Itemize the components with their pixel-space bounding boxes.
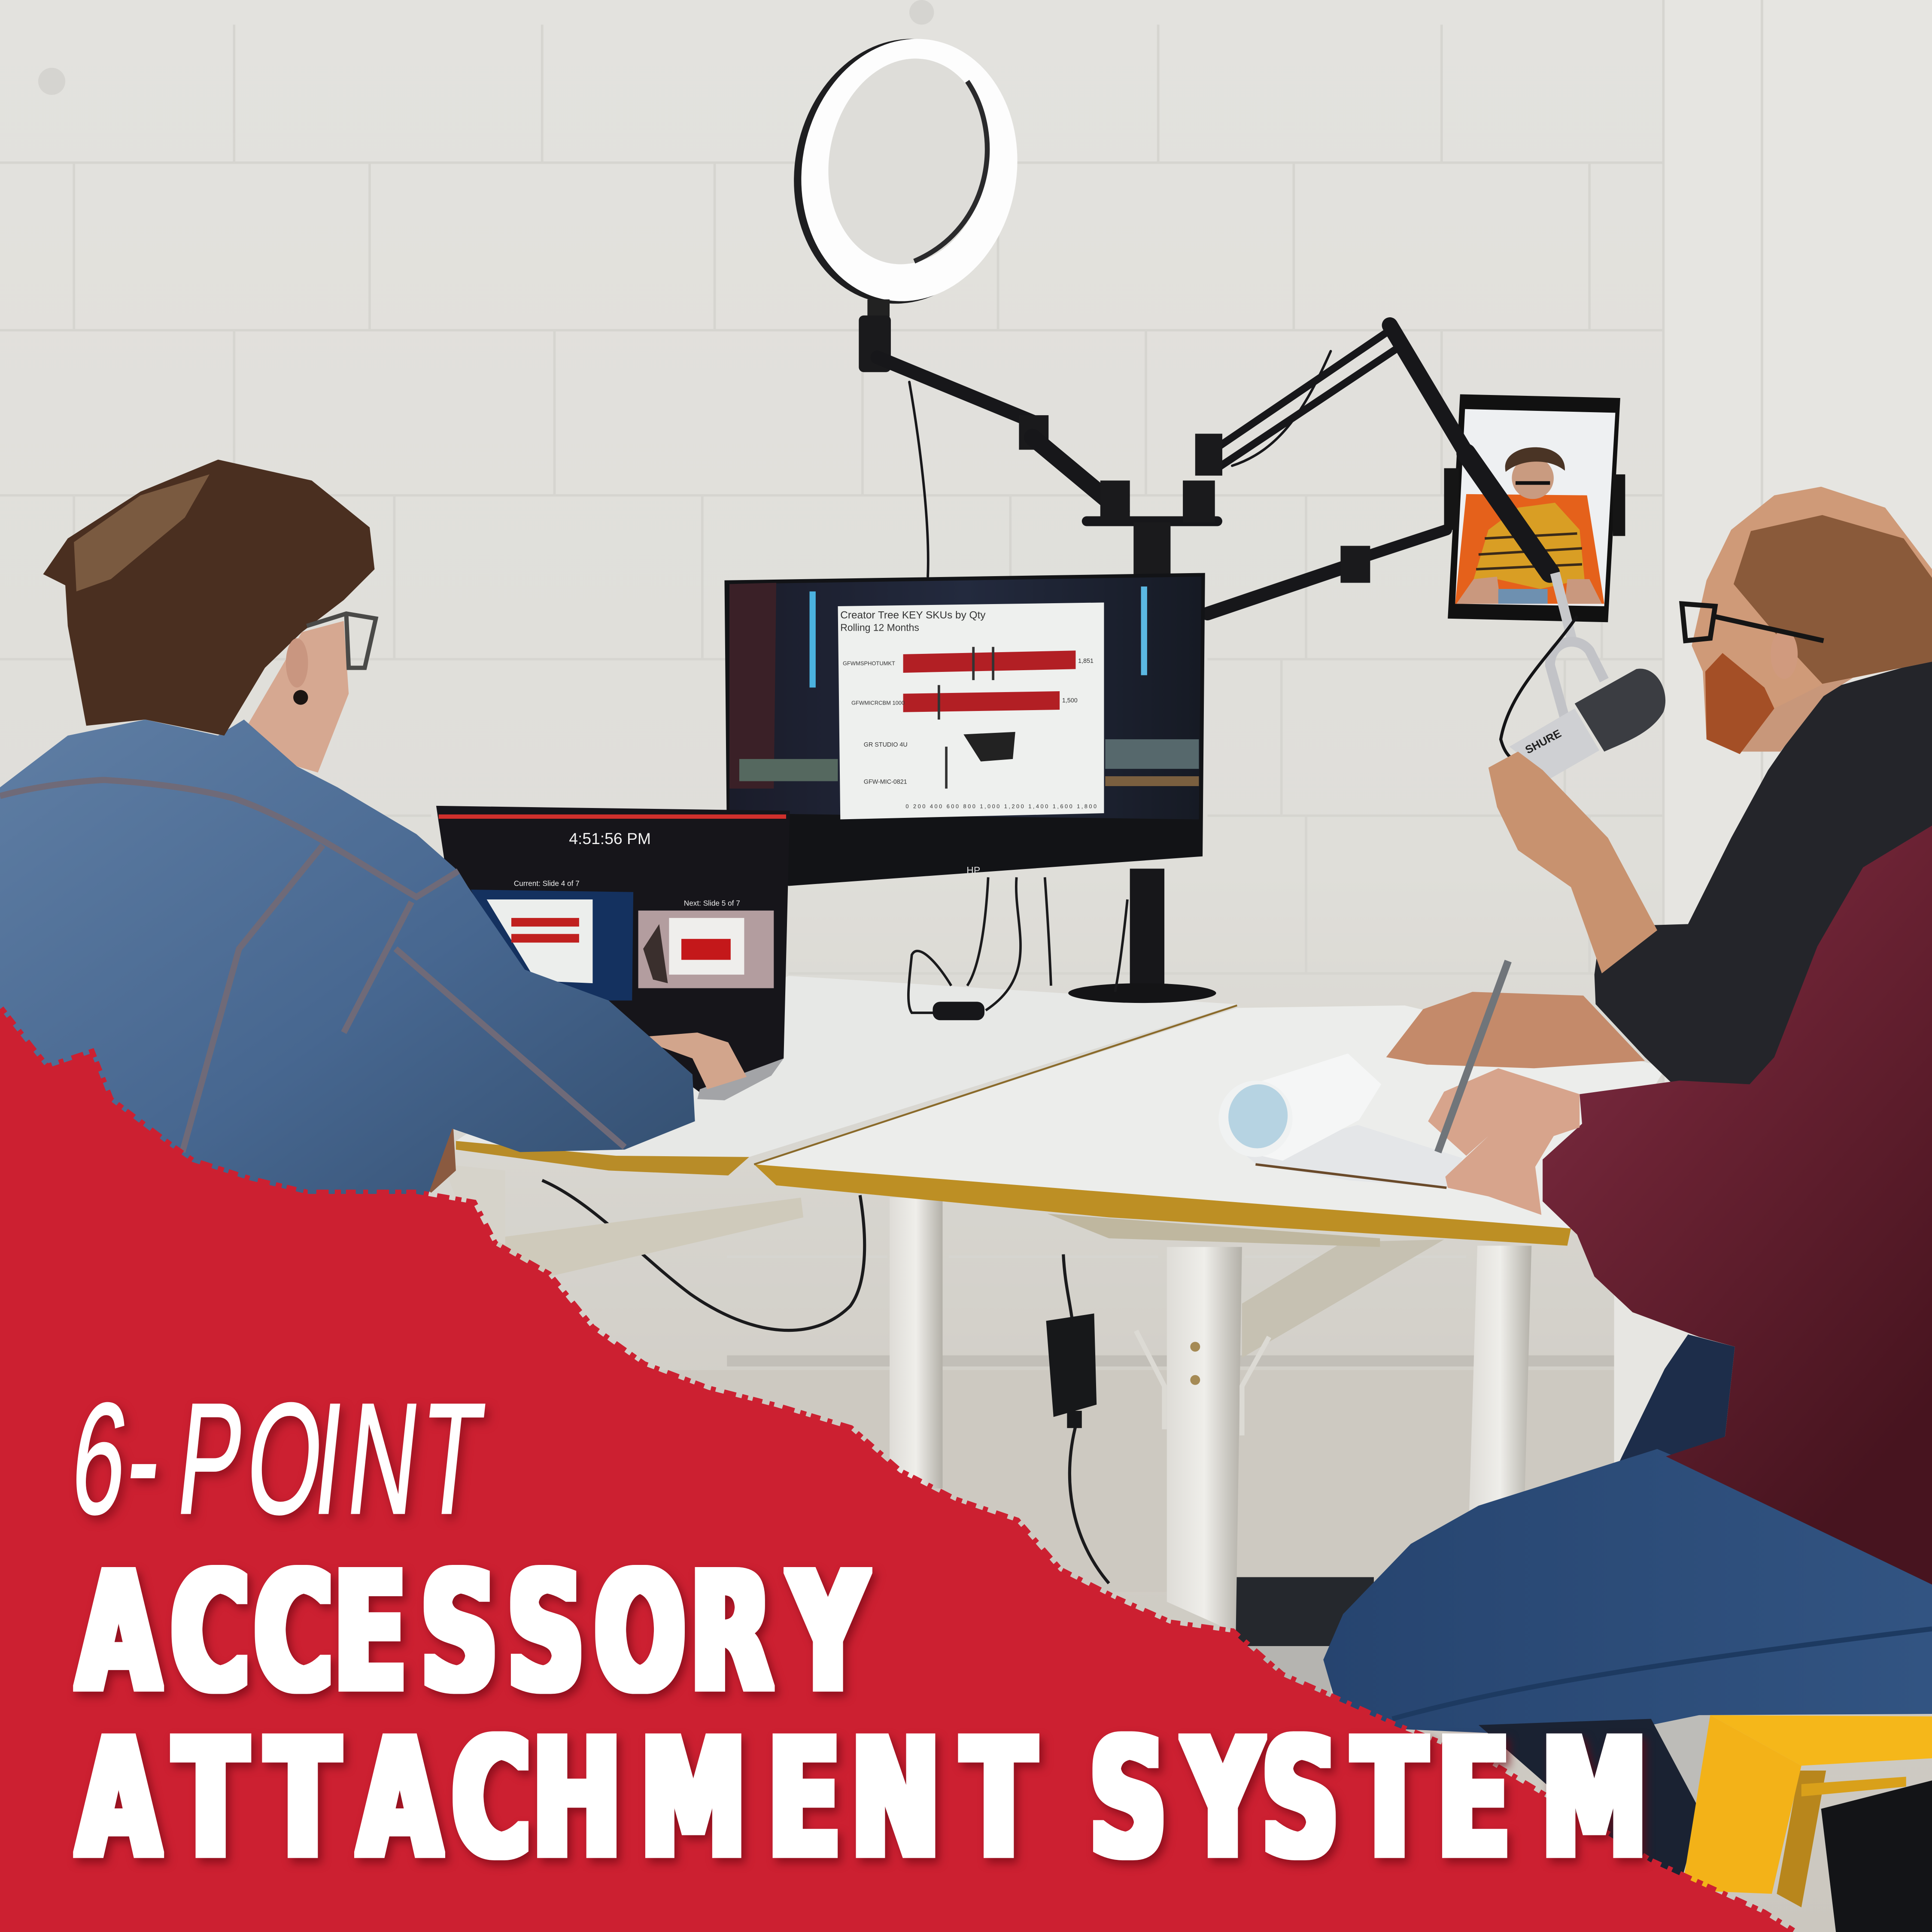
slide on monitor: Rolling 12 Months xyxy=(840,622,919,633)
jacket seams xyxy=(0,780,625,1152)
under-table cables xyxy=(542,1180,1109,1583)
jacket xyxy=(0,720,695,1214)
glasses xyxy=(1682,604,1823,641)
next slide thumbnail xyxy=(638,911,774,988)
jeans xyxy=(1323,1449,1932,1738)
laptop: Current: Slide 4 of 7 xyxy=(514,879,580,887)
monitor: HP xyxy=(966,865,980,876)
hands xyxy=(1428,1068,1580,1215)
slide on monitor: GFWMSPHOTUMKT xyxy=(843,660,895,667)
table legs and struts xyxy=(444,1164,1531,1633)
woman in denim jacket xyxy=(0,459,747,1214)
raised arm and hand xyxy=(1488,752,1657,973)
arm at table edge xyxy=(416,1097,456,1193)
left table xyxy=(456,976,1237,1176)
title line: 6-POINT: 6-POINT xyxy=(64,1371,490,1547)
microphone xyxy=(1501,573,1665,779)
current slide thumbnail xyxy=(471,890,633,1000)
neck xyxy=(1738,653,1873,752)
red torn banner xyxy=(0,1009,1793,1932)
earring xyxy=(293,690,308,705)
slide on monitor: 0 200 400 600 800 1,000 1,200 1,400 1,600 1,800 xyxy=(905,803,1097,810)
ring light xyxy=(773,21,1038,321)
slide on monitor: GFW-MIC-0821 xyxy=(864,778,907,785)
laptop: Next: Slide 5 of 7 xyxy=(684,899,740,907)
title line: ACCESSORY: ACCESSORY xyxy=(78,1538,867,1727)
ear xyxy=(286,638,308,687)
centre post xyxy=(1087,480,1217,577)
title line: ATTACHMENT SYSTEM: ATTACHMENT SYSTEM xyxy=(78,1704,1647,1894)
yellow stool xyxy=(1682,1715,1932,1932)
hair xyxy=(1734,515,1932,684)
right table xyxy=(754,1005,1666,1245)
cable switch xyxy=(933,1002,984,1020)
slide on monitor: 1,851 xyxy=(1078,658,1094,665)
table hand and forearm xyxy=(1386,992,1645,1068)
ear xyxy=(1771,630,1798,679)
tablet boom arm xyxy=(1195,325,1550,573)
head xyxy=(1692,487,1932,754)
lower wall pipe and floor xyxy=(641,1232,1710,1836)
man in burgundy jacket xyxy=(1323,826,1932,1885)
monitor stand xyxy=(1068,869,1216,1003)
hair xyxy=(43,459,374,735)
jacket xyxy=(1543,826,1932,1585)
laptop: 4:51:56 PM xyxy=(569,829,651,848)
far leg xyxy=(1616,1334,1735,1467)
power adapter xyxy=(1046,1313,1097,1428)
ring light arm xyxy=(859,316,1121,577)
person on tablet xyxy=(1456,447,1602,604)
laptop xyxy=(436,806,790,1100)
hand on laptop xyxy=(635,1033,747,1089)
beard xyxy=(1705,653,1774,754)
glasses xyxy=(307,614,376,668)
monitor xyxy=(725,573,1205,886)
slide on monitor: GFWMICRCBM 1000 xyxy=(851,700,905,706)
man in black shirt xyxy=(1386,487,1932,1109)
hair highlight xyxy=(74,474,210,592)
slide on monitor: 1,500 xyxy=(1062,697,1078,704)
face and neck xyxy=(246,621,349,772)
slide on monitor xyxy=(838,602,1104,819)
title xyxy=(64,1371,1647,1894)
pen xyxy=(1438,961,1508,1152)
microphone: SHURE xyxy=(1523,728,1563,756)
slide on monitor: Creator Tree KEY SKUs by Qty xyxy=(840,610,986,621)
lower dark leg xyxy=(1479,1719,1700,1885)
desk cables xyxy=(908,877,1127,1013)
slide on monitor: GR STUDIO 4U xyxy=(864,741,908,748)
tablet xyxy=(1444,394,1625,622)
ring light arm and lower arm xyxy=(859,316,1446,614)
leg hooks and screws xyxy=(1136,1331,1269,1435)
lower tablet arm xyxy=(1207,530,1446,614)
notebook xyxy=(1212,1054,1463,1188)
torso xyxy=(1595,659,1932,1109)
